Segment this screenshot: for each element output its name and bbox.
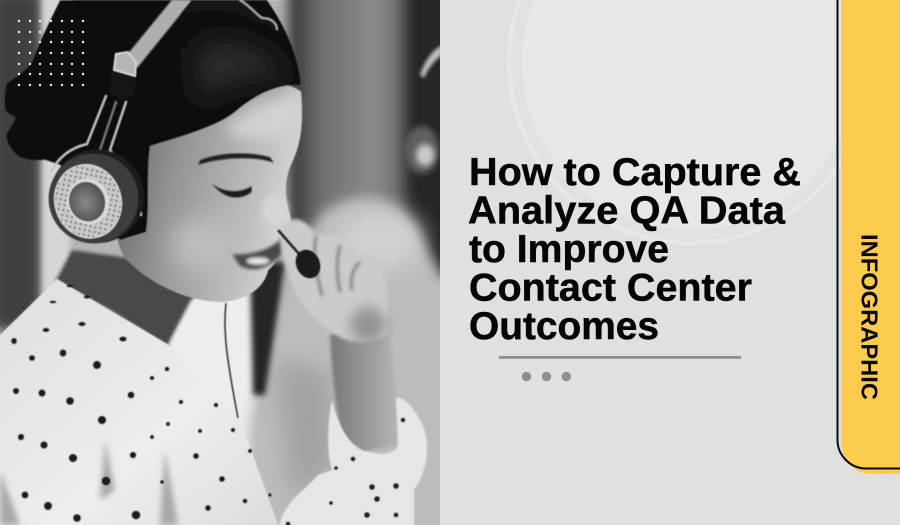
- lips: [232, 240, 282, 269]
- colleague shadow: [275, 360, 335, 500]
- neck: [55, 250, 215, 346]
- blurred colleague in background: [240, 198, 450, 525]
- cuff dots: [286, 418, 405, 525]
- hair sheen: [195, 41, 288, 100]
- microphone: [278, 230, 325, 283]
- dark background shadow: [250, 262, 285, 395]
- hair: [5, 0, 301, 240]
- photo background: [0, 0, 440, 434]
- three dots: [522, 372, 571, 381]
- colleague highlight: [338, 210, 422, 270]
- title: Contact Center: [469, 266, 752, 310]
- lip highlight: [246, 257, 270, 265]
- shirt: [0, 279, 280, 525]
- headband hook: [240, 0, 277, 30]
- infographic label: INFOGRAPHIC: [856, 234, 882, 400]
- title: How to Capture &: [469, 151, 801, 194]
- forehead highlight: [225, 100, 296, 140]
- title: to Improve: [469, 228, 669, 271]
- divider line: [499, 356, 741, 359]
- cheek highlight: [171, 219, 239, 271]
- face: [115, 84, 302, 302]
- finger shadows: [315, 236, 360, 296]
- dot grid decoration: [18, 20, 84, 86]
- decorative circle: [507, 0, 873, 245]
- polka dots: [11, 284, 272, 522]
- title: Analyze QA Data: [468, 190, 786, 232]
- earcup stems: [51, 96, 141, 215]
- shirt shadow: [0, 440, 178, 525]
- headband: [127, 0, 192, 68]
- hand: [281, 219, 388, 342]
- forearm: [328, 333, 396, 452]
- nose highlight: [262, 195, 288, 225]
- wrist shadow: [350, 307, 386, 343]
- photo: woman with headset: [0, 0, 455, 525]
- earcup: [48, 149, 144, 244]
- title: [468, 151, 801, 348]
- shirt cuff: [278, 398, 427, 525]
- headband slider: [110, 52, 136, 100]
- eyebrow: [198, 153, 274, 165]
- yellow side tab: [838, 0, 900, 474]
- headband right end: [180, 0, 277, 30]
- title: Outcomes: [469, 305, 659, 348]
- right panel background: [440, 0, 900, 525]
- headset wire: [225, 303, 238, 418]
- eye: [212, 184, 252, 198]
